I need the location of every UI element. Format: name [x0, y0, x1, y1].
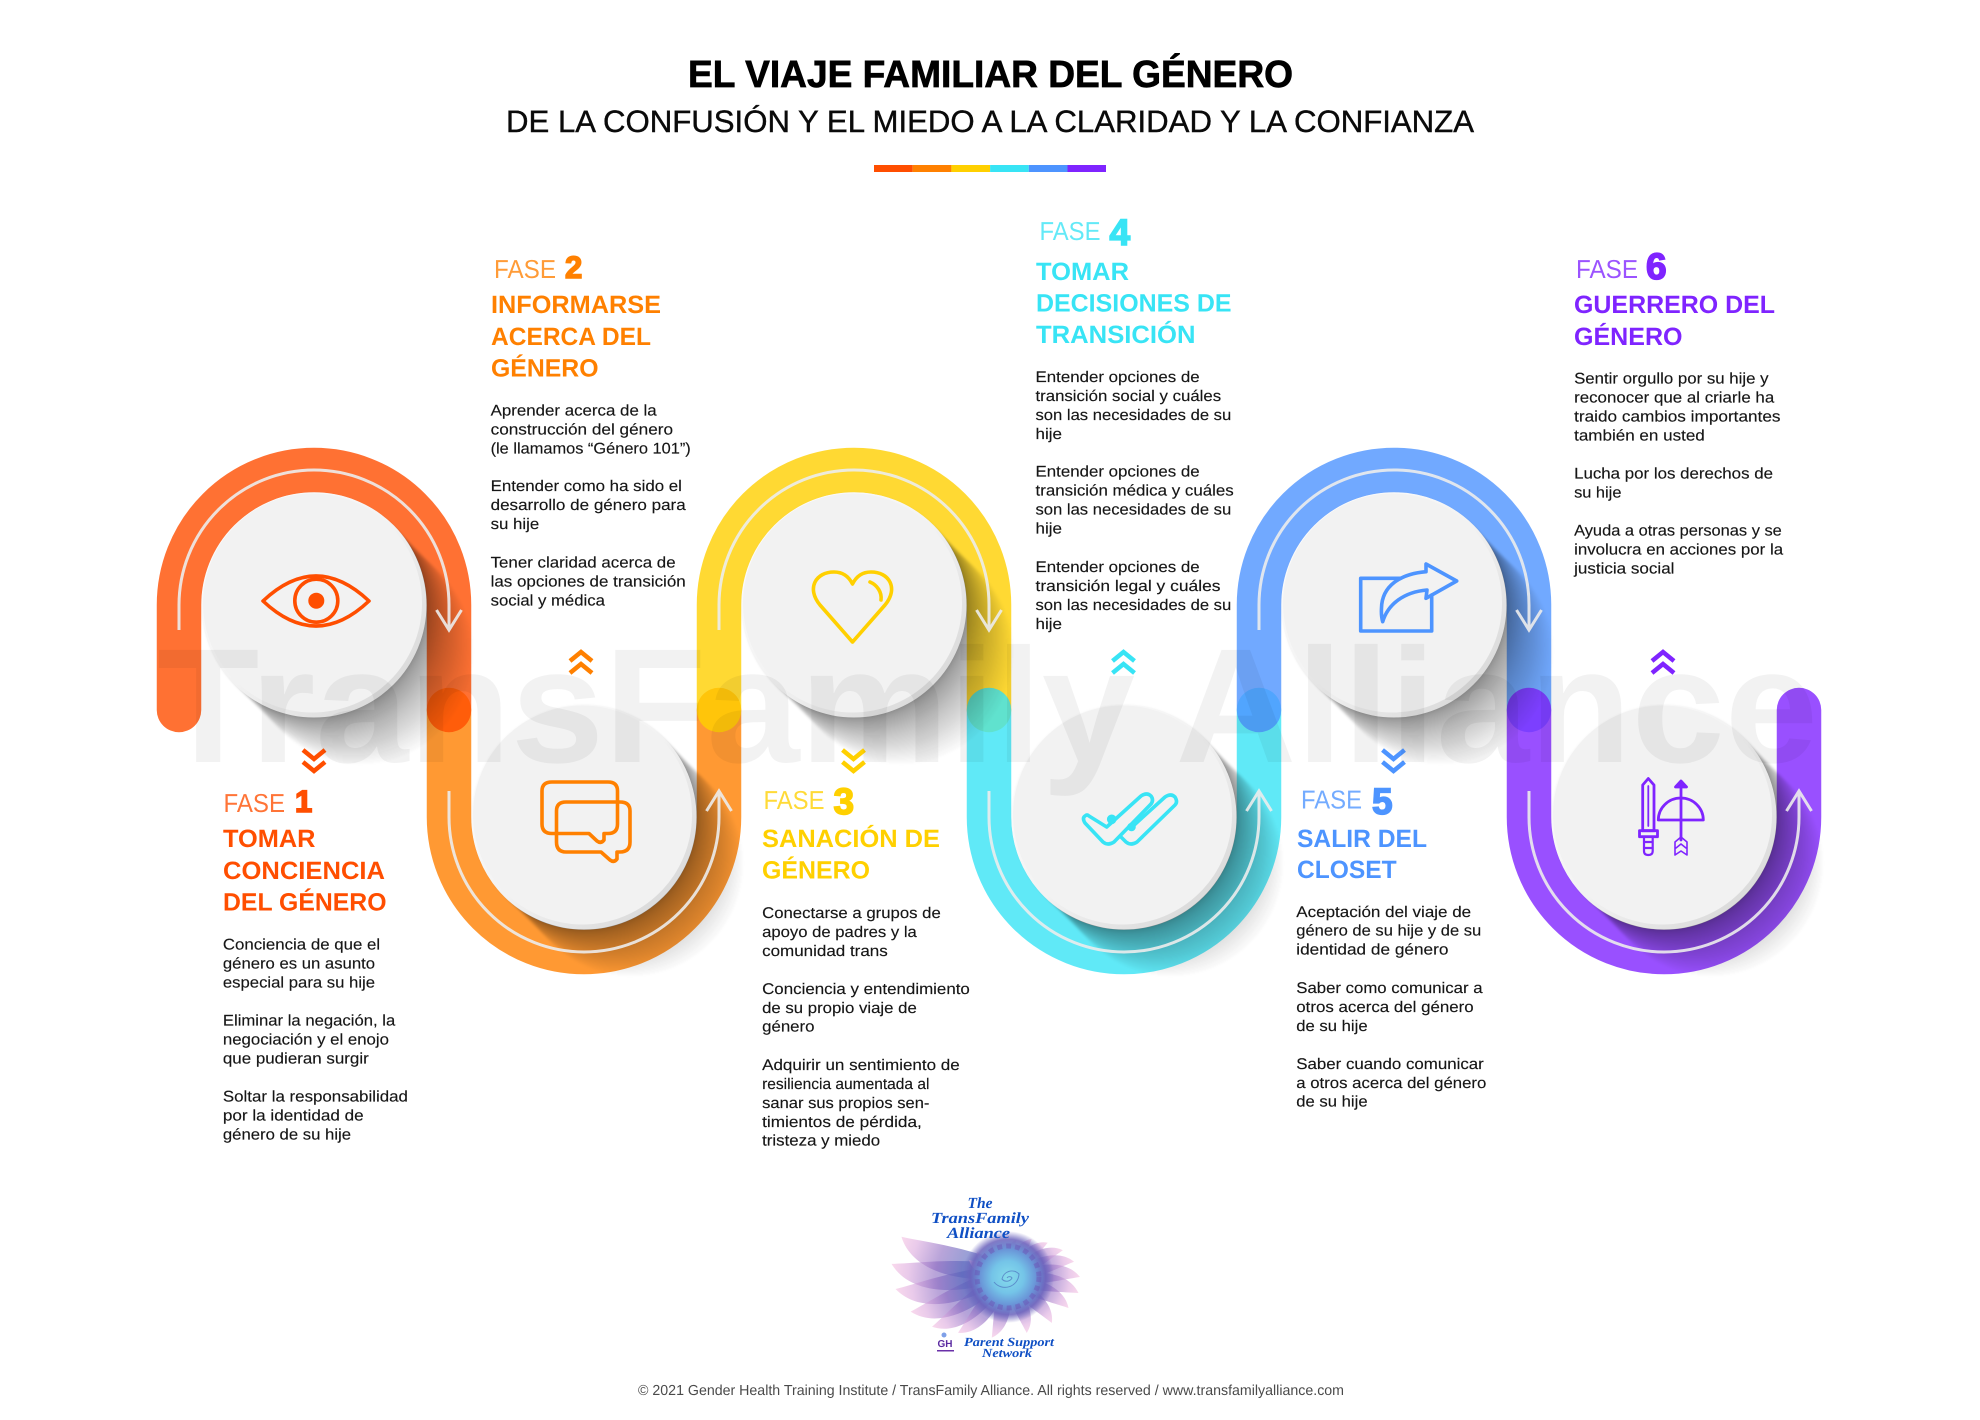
subtitle: DE LA CONFUSIÓN Y EL MIEDO A LA CLARIDAD Y LA CONFIANZA [506, 104, 1474, 139]
body text 2: su hije [491, 515, 540, 533]
chevrons: fase 1 down [303, 750, 325, 771]
logo subtitle: Parent Support [964, 1335, 1055, 1349]
heading 4: DECISIONES DE [1036, 290, 1232, 318]
phase label 2: 2 [565, 250, 582, 285]
body text 6: Lucha por los derechos de [1574, 464, 1773, 482]
body text 4: hije [1035, 520, 1062, 537]
body text 1: por la identidad de [223, 1107, 364, 1124]
band: fase 6 [1529, 710, 1799, 952]
body text 5: identidad de género [1296, 941, 1449, 958]
phase label 1: 1 [295, 784, 312, 819]
heading 5: CLOSET [1297, 856, 1397, 884]
body text 1: Eliminar la negación, la [223, 1012, 396, 1029]
body text 3: Conciencia y entendimiento [762, 980, 970, 998]
body text 2 [491, 402, 691, 609]
body text 4: Entender opciones de [1035, 558, 1200, 576]
icon: chat bubbles [542, 782, 630, 861]
logo subtitle: Network [981, 1346, 1033, 1360]
body text 1 [223, 936, 408, 1143]
heading 2 [491, 291, 661, 383]
phase label 6: 6 [1646, 246, 1667, 287]
body text 3: comunidad trans [762, 942, 888, 960]
heading 2: ACERCA DEL [491, 323, 651, 351]
body text 5: Saber cuando comunicar [1296, 1055, 1484, 1073]
logo title [931, 1195, 1029, 1242]
body text 3: género [762, 1018, 815, 1035]
heading 4: TOMAR [1036, 258, 1129, 286]
rainbow divider bar [874, 165, 1106, 172]
band: fase 1 [179, 470, 449, 710]
arrow: fase 4 [989, 791, 1272, 952]
body text 6: involucra en acciones por la [1574, 540, 1783, 558]
phase label 5: 5 [1372, 781, 1393, 822]
heading 1 [223, 825, 386, 916]
body text 5: de su hije [1296, 1093, 1368, 1111]
icon: heart [813, 572, 892, 642]
body text 1: negociación y el enojo [223, 1030, 389, 1048]
logo subtitle [964, 1335, 1055, 1360]
body text 1: Conciencia de que el [223, 936, 380, 953]
winding coloured path [179, 470, 1799, 952]
body text 3: apoyo de padres y la [762, 923, 917, 941]
footer copyright: © 2021 Gender Health Training Institute / TransFamily Alliance. All rights reserved / www.transfamilyalliance.com [638, 1383, 1344, 1399]
body text 6 [1573, 370, 1783, 577]
heading 3: SANACIÓN DE [762, 824, 940, 853]
body text 2: desarrollo de género para [491, 496, 686, 514]
heading 2: GÉNERO [491, 354, 598, 383]
chevrons: fase 4 up [1112, 652, 1134, 673]
body text 3: tristeza y miedo [762, 1132, 880, 1150]
heading 5: SALIR DEL [1297, 825, 1427, 853]
body text 5 [1296, 903, 1487, 1111]
body text 3: de su propio viaje de [762, 999, 917, 1017]
arrow: fase 5 [1259, 470, 1542, 630]
long shadows of the circles [202, 493, 1823, 976]
small emblem: GH [938, 1339, 952, 1350]
small emblem [937, 1332, 954, 1352]
panel: fase 2 [491, 250, 691, 609]
body text 1: especial para su hije [223, 974, 375, 991]
body text 4: hije [1035, 425, 1062, 443]
body text 6: Sentir orgullo por su hije y [1574, 370, 1770, 387]
circle: fase 4 [1012, 704, 1236, 930]
body text 4: transición social y cuáles [1035, 387, 1221, 405]
panel: fase 6 [1573, 246, 1783, 577]
panel: fase 1 [223, 784, 408, 1143]
body text 5: de su hije [1296, 1017, 1368, 1035]
band: fase 4 [989, 710, 1259, 952]
body text 3: timientos de pérdida, [762, 1113, 922, 1131]
thin arrows inside the bands [179, 470, 1812, 952]
body text 1: Soltar la responsabilidad [223, 1088, 408, 1105]
phase label 3: 3 [834, 781, 854, 822]
body text 4: Entender opciones de [1035, 463, 1200, 480]
band: fase 5 [1259, 470, 1529, 710]
body text 3: sanar sus propios sen- [762, 1094, 929, 1112]
arrow: fase 1 [179, 470, 462, 630]
phase label 4: 4 [1110, 212, 1130, 253]
logo title: The [968, 1195, 993, 1212]
heading 4: TRANSICIÓN [1036, 320, 1196, 349]
chevrons: fase 6 up [1652, 652, 1674, 673]
body text 4: hije [1035, 615, 1062, 633]
chevrons: fase 5 down [1382, 750, 1404, 771]
body text 5: género de su hije y de su [1296, 922, 1481, 940]
phase label 1 [224, 784, 312, 819]
icon: double check [1084, 794, 1176, 844]
circle: fase 5 [1282, 492, 1506, 718]
arrow: fase 6 [1529, 791, 1812, 952]
body text 2: Tener claridad acerca de [491, 553, 676, 571]
phase label 5: FASE [1301, 784, 1362, 814]
body text 4: transición médica y cuáles [1035, 482, 1234, 499]
body text 5: Saber como comunicar a [1296, 979, 1483, 997]
body text 6: su hije [1574, 483, 1622, 501]
body text 6: justicia social [1573, 559, 1674, 577]
body text 6: también en usted [1574, 427, 1705, 444]
body text 4: son las necesidades de su [1035, 596, 1231, 614]
chevrons: fase 2 up [570, 652, 592, 673]
phase label 5 [1301, 781, 1393, 822]
body text 1: que pudieran surgir [223, 1049, 369, 1067]
body text 1: género es un asunto [223, 955, 375, 972]
body text 2: construcción del género [491, 421, 673, 438]
body text 6: traido cambios importantes [1574, 408, 1781, 425]
body text 4: transición legal y cuáles [1035, 577, 1220, 595]
phase label 2 [494, 250, 582, 285]
phase label 4 [1040, 212, 1130, 253]
panel: fase 5 [1296, 781, 1487, 1111]
heading 3: GÉNERO [762, 856, 870, 884]
heading 6: GUERRERO DEL [1574, 291, 1775, 319]
heading 4 [1036, 258, 1232, 349]
heading 1: TOMAR [223, 825, 316, 853]
phase label 2: FASE [494, 254, 556, 284]
watermark: TransFamily Alliance [157, 614, 1818, 797]
phase label 1: FASE [224, 788, 285, 818]
icon: eye [263, 576, 369, 626]
heading 1: CONCIENCIA [223, 857, 385, 885]
body text 3: Adquirir un sentimiento de [762, 1056, 960, 1074]
body text 2: Entender como ha sido el [491, 477, 682, 495]
logo title: TransFamily [931, 1210, 1029, 1227]
band: fase 2 [449, 710, 719, 952]
panel: fase 4 [1035, 212, 1234, 633]
heading 6 [1574, 291, 1775, 351]
body text 2: (le llamamos “Género 101”) [491, 439, 691, 457]
phase label 6: FASE [1576, 254, 1638, 284]
arrow: fase 3 [719, 470, 1002, 630]
body text 3 [762, 904, 970, 1150]
heading 2: INFORMARSE [491, 291, 661, 319]
phase label 6 [1576, 246, 1667, 287]
circle: fase 6 [1552, 704, 1776, 930]
body text 4: Entender opciones de [1035, 368, 1200, 386]
circle: fase 2 [472, 704, 696, 930]
arrow: fase 2 [449, 791, 732, 952]
logo title: Alliance [946, 1225, 1010, 1242]
heading 5 [1297, 825, 1427, 884]
title: EL VIAJE FAMILIAR DEL GÉNERO [688, 53, 1293, 96]
body text 1: género de su hije [223, 1126, 351, 1143]
body text 6: Ayuda a otras personas y se [1574, 522, 1782, 539]
body text 2: las opciones de transición [491, 572, 686, 590]
body text 4: son las necesidades de su [1035, 406, 1231, 424]
body text 2: social y médica [491, 591, 605, 609]
logo: TransFamily Alliance [889, 1195, 1081, 1360]
icon: sword and bow [1640, 778, 1703, 855]
icon: share arrow [1361, 564, 1457, 631]
heading 1: DEL GÉNERO [223, 888, 386, 916]
body text 3: resiliencia aumentada al [762, 1075, 929, 1093]
phase label 3: FASE [764, 785, 824, 815]
phase label 4: FASE [1040, 216, 1100, 246]
body text 5: otros acerca del género [1296, 998, 1474, 1016]
body text 3: Conectarse a grupos de [762, 904, 941, 922]
panel: fase 3 [762, 781, 970, 1150]
logo spiral shell [889, 1226, 1081, 1342]
chevrons: fase 3 down [842, 750, 864, 771]
heading 3 [762, 824, 940, 884]
band: fase 3 [719, 470, 989, 710]
body text 4: son las necesidades de su [1035, 501, 1231, 518]
body text 6: reconocer que al criarle ha [1574, 389, 1775, 406]
body text 5: a otros acerca del género [1296, 1074, 1487, 1092]
circle: fase 3 [742, 492, 966, 718]
phase label 3 [764, 781, 854, 822]
body text 4 [1035, 368, 1234, 633]
body text 2: Aprender acerca de la [491, 402, 657, 419]
heading 6: GÉNERO [1574, 322, 1682, 351]
circle: fase 1 [202, 492, 426, 718]
body text 5: Aceptación del viaje de [1296, 903, 1471, 921]
